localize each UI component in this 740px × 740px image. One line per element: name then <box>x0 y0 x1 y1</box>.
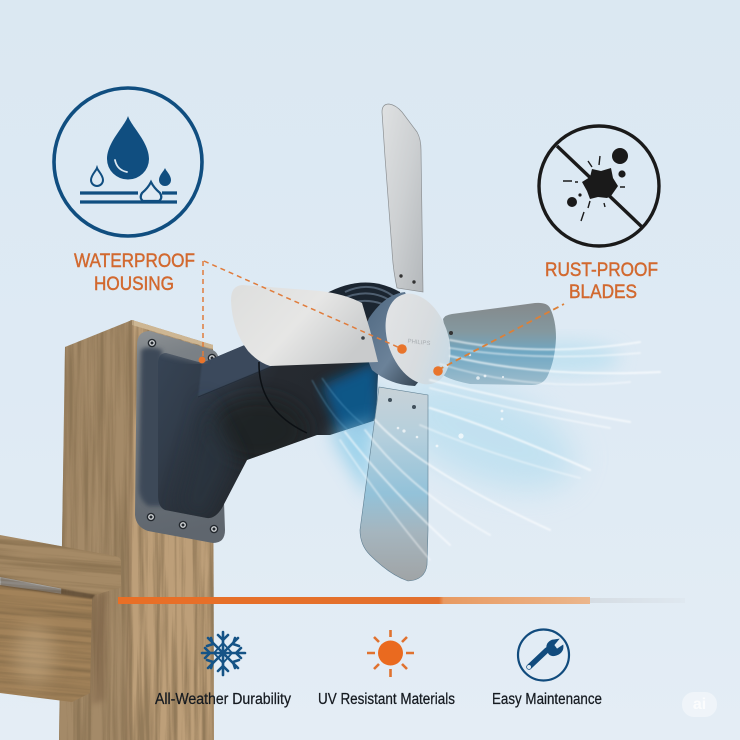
icon: snowflake <box>202 632 245 675</box>
callout dots <box>199 344 407 363</box>
icon: waterproof <box>54 88 202 236</box>
feature labels: UV Resistant Materials <box>318 691 455 708</box>
feature labels: All-Weather Durability <box>155 691 291 708</box>
hub logo: PHILIPS <box>407 339 431 347</box>
heading: waterproof housing: HOUSING <box>94 273 174 295</box>
housing mount <box>135 282 410 543</box>
blade: top <box>382 104 423 292</box>
icon: no rust <box>539 126 659 246</box>
mounting plate <box>135 331 225 543</box>
blue arm glow <box>322 360 380 438</box>
blade: left <box>231 285 378 366</box>
icon: sun <box>367 630 414 677</box>
water droplets <box>397 354 504 447</box>
arm shadow <box>208 396 308 464</box>
blade screws <box>388 274 453 409</box>
callout: rust-proof blades leader <box>433 304 564 376</box>
blade: bottom <box>360 387 428 581</box>
divider bar <box>118 597 685 604</box>
airflow streaks on arm <box>312 378 364 432</box>
callout: waterproof housing leader <box>199 261 407 363</box>
fan <box>231 104 556 581</box>
ai badge: ai <box>693 696 706 713</box>
hub face <box>374 285 462 393</box>
heading: waterproof housing <box>74 250 195 295</box>
icon: wrench <box>518 630 569 680</box>
wooden post and rail <box>0 318 217 740</box>
heading: rust-proof blades: BLADES <box>569 281 637 303</box>
hub side <box>364 292 430 386</box>
blue airflow glow behind housing <box>325 388 385 432</box>
ai badge <box>682 692 717 717</box>
feature labels <box>155 691 602 708</box>
heading: rust-proof blades: RUST-PROOF <box>545 259 658 281</box>
heading: waterproof housing: WATERPROOF <box>74 250 195 272</box>
arm facet <box>198 345 274 396</box>
collar seam <box>259 362 307 433</box>
vented rear <box>325 282 410 400</box>
blade: right <box>443 303 556 385</box>
wind lines <box>340 340 660 560</box>
top edge light <box>162 351 205 361</box>
feature labels: Easy Maintenance <box>492 691 602 708</box>
heading: rust-proof blades <box>545 259 658 303</box>
left flank <box>139 348 166 506</box>
rail <box>0 535 121 704</box>
post <box>55 318 217 740</box>
housing arm <box>158 317 378 518</box>
wind glow <box>330 342 620 512</box>
